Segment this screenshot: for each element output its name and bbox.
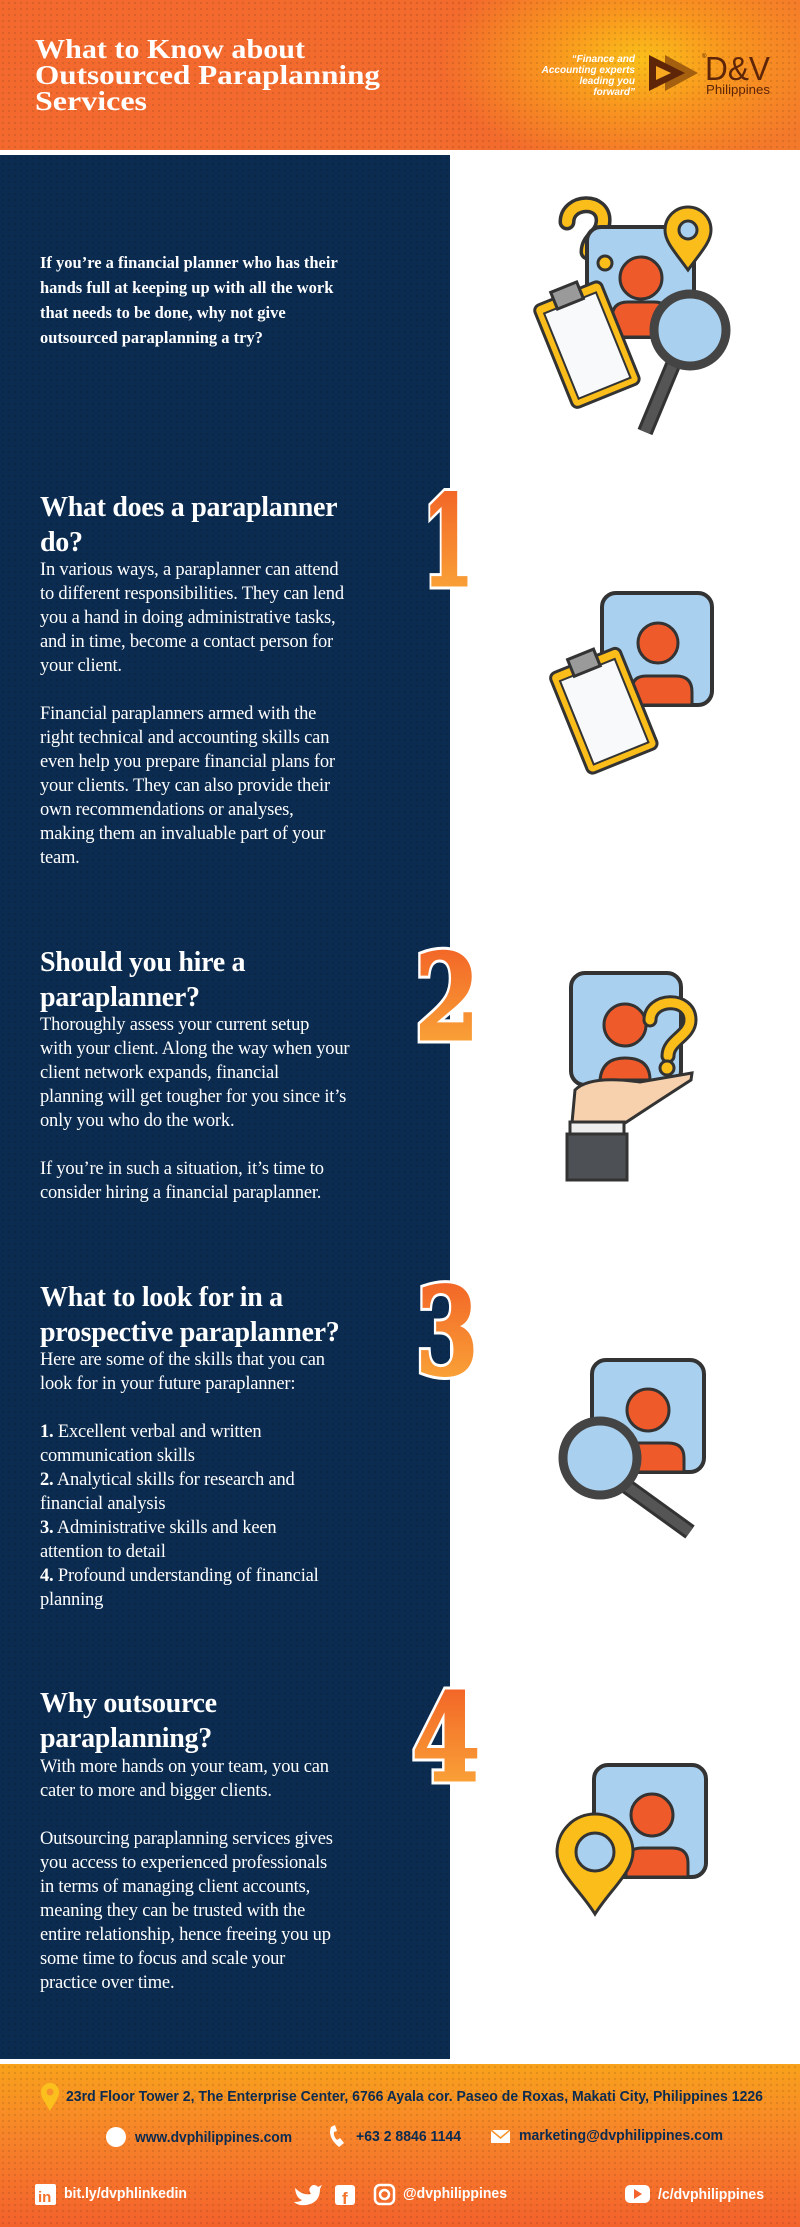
section 2 body: only you who do the work.	[40, 1111, 234, 1131]
section 3 body with skill list: financial analysis	[40, 1494, 165, 1514]
footer contact bar: marketing@dvphilippines.com	[519, 2127, 723, 2144]
icon: intro illustration	[533, 196, 730, 436]
section 4 heading: Why outsource	[40, 1688, 217, 1719]
section 3 body with skill list: look for in your future paraplanner:	[40, 1374, 295, 1394]
section 2 heading	[40, 947, 246, 1013]
title: Outsourced Paraplanning	[35, 60, 381, 90]
icon: hand holding profile	[566, 971, 698, 1182]
navy content panel	[0, 155, 450, 2059]
icon: linkedin: in	[38, 2189, 51, 2206]
section 3 body with skill list: planning	[40, 1590, 103, 1610]
section 3 body with skill list	[40, 1350, 325, 1610]
section 2 body: consider hiring a financial paraplanner.	[40, 1183, 321, 1203]
intro text: that needs to be done, why not give	[40, 303, 286, 322]
footer contact bar	[0, 2064, 800, 2227]
section 1 body: team.	[40, 848, 80, 868]
logo with tagline: Accounting experts	[541, 65, 635, 76]
icon: facebook: f	[342, 2189, 348, 2208]
logo with tagline: Philippines	[706, 82, 771, 97]
section 2 body: planning will get tougher for you since it’s	[40, 1087, 346, 1107]
section 1 body: and in time, become a contact person for	[40, 632, 333, 652]
icon: facebook	[335, 2185, 355, 2208]
section 1 body: your client.	[40, 656, 122, 676]
section 4 body	[40, 1757, 333, 1993]
section 4 body: some time to focus and scale your	[40, 1949, 285, 1969]
icon: phone	[330, 2125, 344, 2147]
section 4 body: in terms of managing client accounts,	[40, 1877, 310, 1897]
header banner	[0, 0, 800, 150]
section 4 body: With more hands on your team, you can	[40, 1757, 329, 1777]
icon: linkedin	[35, 2184, 56, 2206]
section 1 body: to different responsibilities. They can lend	[40, 584, 344, 604]
section 4 body: Outsourcing paraplanning services gives	[40, 1829, 333, 1849]
section 4 body: practice over time.	[40, 1973, 174, 1993]
section 2 body: client network expands, financial	[40, 1063, 279, 1083]
title: Services	[35, 86, 147, 116]
icon: twitter	[294, 2185, 322, 2205]
footer contact bar: bit.ly/dvphlinkedin	[64, 2185, 187, 2202]
section 4 heading: paraplanning?	[40, 1723, 212, 1754]
title	[35, 34, 381, 116]
footer contact bar: /c/dvphilippines	[658, 2186, 764, 2203]
intro text: outsourced paraplanning a try?	[40, 328, 263, 347]
section 1 heading	[40, 492, 337, 558]
section 1 body: even help you prepare financial plans for	[40, 752, 335, 772]
icon: instagram	[375, 2185, 394, 2204]
section 3 heading	[40, 1282, 340, 1348]
section 2 body: Thoroughly assess your current setup	[40, 1015, 309, 1035]
section 4 body: entire relationship, hence freeing you up	[40, 1925, 331, 1945]
section 3 body with skill list: 3. Administrative skills and keen	[40, 1518, 276, 1538]
footer contact bar: www.dvphilippines.com	[134, 2129, 292, 2146]
number 1	[422, 480, 474, 595]
section 1 body: own recommendations or analyses,	[40, 800, 294, 820]
section 4 body: meaning they can be trusted with the	[40, 1901, 305, 1921]
section 4 body: cater to more and bigger clients.	[40, 1781, 272, 1801]
intro text	[40, 253, 338, 347]
footer contact bar: 23rd Floor Tower 2, The Enterprise Center, 6766 Ayala cor. Paseo de Roxas, Makati City, Philippines 1226	[66, 2088, 763, 2105]
icon: youtube	[625, 2185, 650, 2203]
section 1 body: right technical and accounting skills can	[40, 728, 329, 748]
section 4 heading	[40, 1688, 217, 1754]
section 3 heading: prospective paraplanner?	[40, 1317, 340, 1348]
logo with tagline: leading you	[579, 76, 635, 87]
logo with tagline: ®	[702, 53, 707, 60]
logo with tagline: forward”	[593, 87, 635, 98]
section 3 body with skill list: Here are some of the skills that you can	[40, 1350, 325, 1370]
icon: address pin	[41, 2083, 59, 2111]
section 1 body: your clients. They can also provide their	[40, 776, 330, 796]
section 1 body: you a hand in doing administrative tasks,	[40, 608, 335, 628]
section 2 body: with your client. Along the way when your	[40, 1039, 349, 1059]
section 1 heading: What does a paraplanner	[40, 492, 337, 523]
section 2 body: If you’re in such a situation, it’s time to	[40, 1159, 324, 1179]
section 1 body: In various ways, a paraplanner can attend	[40, 560, 338, 580]
section 3 body with skill list: 2. Analytical skills for research and	[40, 1470, 295, 1490]
section 2 heading: paraplanner?	[40, 982, 200, 1013]
icon: clipboard and profile	[549, 591, 714, 775]
logo with tagline: D&V	[705, 50, 770, 87]
section 1 body	[40, 560, 344, 868]
section 1 body: making them an invaluable part of your	[40, 824, 325, 844]
section 3 body with skill list: communication skills	[40, 1446, 195, 1466]
footer contact bar: +63 2 8846 1144	[356, 2128, 462, 2145]
section 4 body: you access to experienced professionals	[40, 1853, 327, 1873]
section 1 body: Financial paraplanners armed with the	[40, 704, 316, 724]
title: What to Know about	[35, 34, 305, 64]
section 3 heading: What to look for in a	[40, 1282, 283, 1313]
section 2 body	[40, 1015, 350, 1203]
intro text: If you’re a financial planner who has their	[40, 253, 338, 272]
section 3 body with skill list: 4. Profound understanding of financial	[40, 1566, 319, 1586]
section 3 body with skill list: attention to detail	[40, 1542, 166, 1562]
section 2 heading: Should you hire a	[40, 947, 245, 978]
icon: mail	[491, 2130, 510, 2143]
icon: location pin and profile	[556, 1763, 708, 1917]
icon: web	[106, 2127, 126, 2147]
logo with tagline: “Finance and	[572, 54, 636, 65]
icon: magnifier and profile	[558, 1358, 706, 1538]
section 1 heading: do?	[40, 527, 83, 558]
section 3 body with skill list: 1. Excellent verbal and written	[40, 1422, 261, 1442]
logo with tagline	[541, 50, 771, 98]
intro text: hands full at keeping up with all the work	[40, 278, 333, 297]
footer contact bar: @dvphilippines	[403, 2185, 507, 2202]
